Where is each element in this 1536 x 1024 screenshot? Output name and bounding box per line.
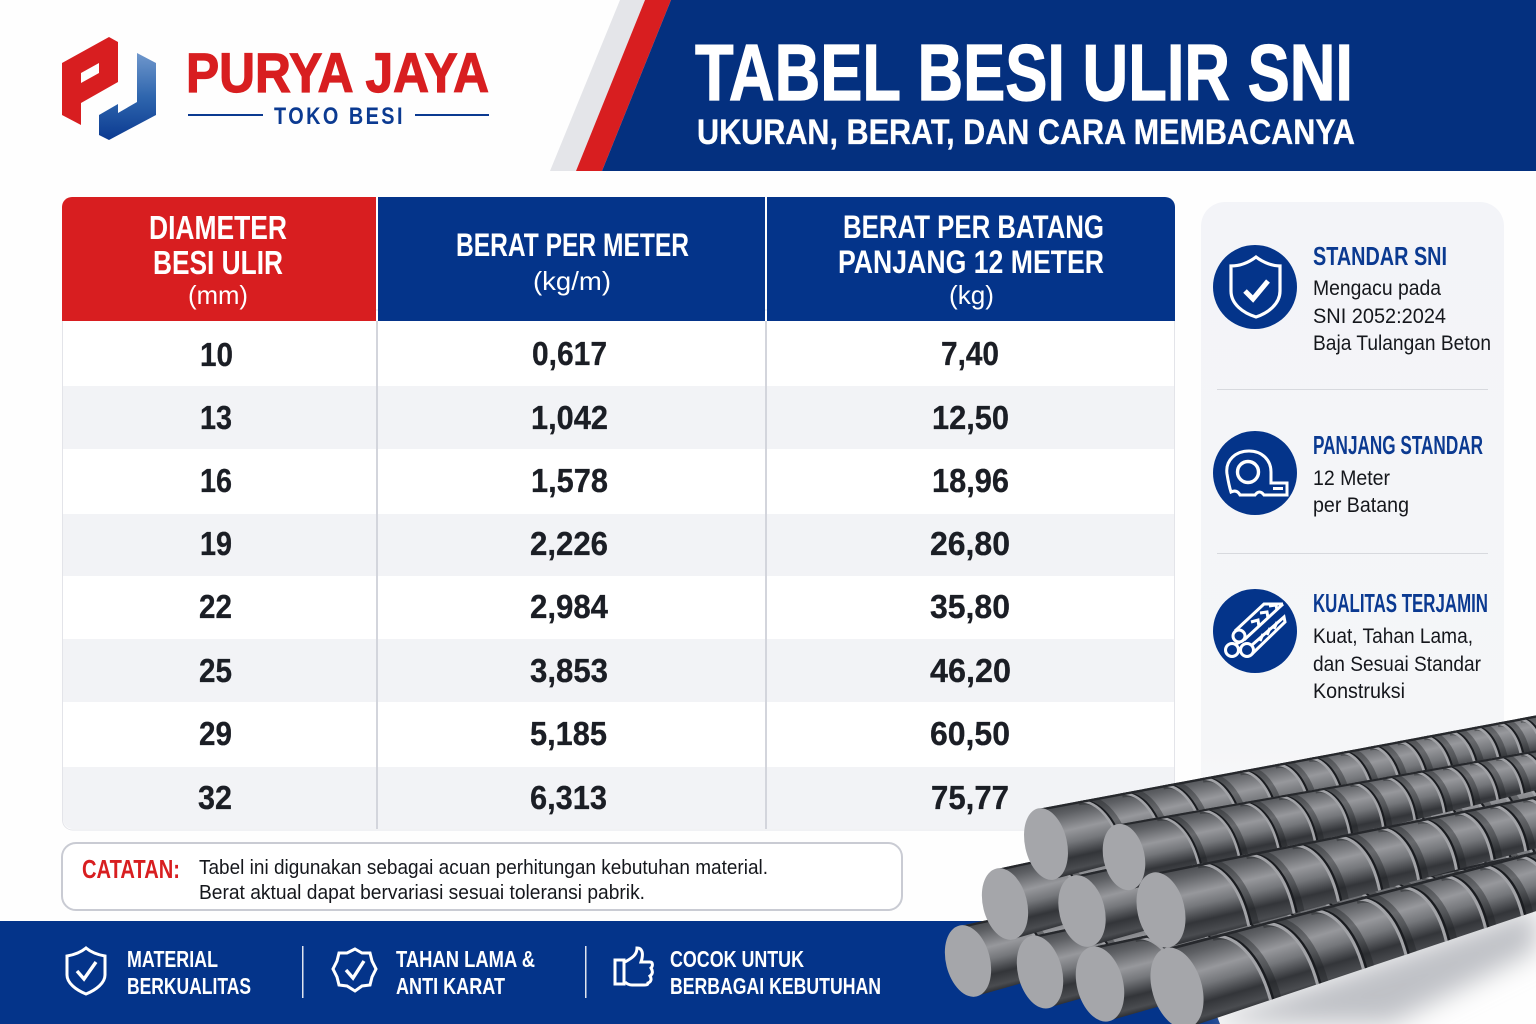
row 16 mm: 18,96 bbox=[932, 462, 1009, 499]
ground shadow under rebar bbox=[1200, 908, 1536, 1024]
row 25 mm bbox=[199, 652, 1011, 689]
row 10 mm: 10 bbox=[200, 336, 233, 373]
footer item: tahan lama: TAHAN LAMA & bbox=[396, 946, 535, 972]
footer item: cocok bbox=[615, 946, 881, 999]
row 13 mm bbox=[200, 399, 1009, 436]
note: catatan: Berat aktual dapat bervariasi sesuai toleransi pabrik. bbox=[199, 882, 645, 904]
panel: info side bbox=[1201, 202, 1504, 842]
icon: thumbs up bbox=[615, 948, 652, 985]
subtitle: UKURAN, BERAT, DAN CARA MEMBACANYA bbox=[697, 113, 1355, 152]
row 22 mm: 22 bbox=[199, 588, 232, 625]
info: standar SNI: SNI 2052:2024 bbox=[1313, 305, 1446, 328]
row 16 mm: 1,578 bbox=[531, 462, 608, 499]
row 32 mm bbox=[198, 779, 1009, 816]
row 10 mm: 7,40 bbox=[941, 335, 999, 372]
row 29 mm: 60,50 bbox=[930, 715, 1010, 752]
icon: shield check bbox=[1213, 245, 1297, 329]
info: panjang standar bbox=[1213, 430, 1483, 517]
row 29 mm bbox=[199, 715, 1010, 752]
table header: berat per meter bbox=[378, 197, 765, 321]
row 25 mm: 25 bbox=[199, 652, 232, 689]
table header: diameter: (mm) bbox=[188, 280, 248, 310]
row 32 mm: 32 bbox=[198, 779, 232, 816]
row 25 mm: 3,853 bbox=[530, 652, 608, 689]
table header: berat per batang: (kg) bbox=[949, 280, 994, 310]
info: standar SNI bbox=[1213, 241, 1491, 355]
info: panjang standar: 12 Meter bbox=[1313, 467, 1390, 490]
footer band bbox=[0, 921, 1220, 1024]
row 16 mm: 16 bbox=[200, 462, 232, 499]
icon: rebar bundle bbox=[1213, 589, 1297, 673]
data table bbox=[62, 197, 1175, 830]
info: standar SNI: STANDAR SNI bbox=[1313, 241, 1447, 271]
row 25 mm: 46,20 bbox=[930, 652, 1011, 689]
logo bbox=[62, 37, 489, 140]
icon: badge check bbox=[333, 949, 376, 991]
table header: berat per batang bbox=[767, 197, 1175, 321]
row 22 mm: 2,984 bbox=[530, 588, 609, 625]
footer item: tahan lama: ANTI KARAT bbox=[396, 973, 505, 999]
logo tagline: TOKO BESI bbox=[274, 103, 405, 130]
table body background bbox=[62, 310, 1174, 830]
note: catatan bbox=[62, 843, 902, 910]
info: kualitas terjamin: Konstruksi bbox=[1313, 680, 1405, 703]
info: standar SNI: Mengacu pada bbox=[1313, 277, 1441, 300]
table header: berat per meter: (kg/m) bbox=[533, 266, 611, 296]
row 19 mm bbox=[200, 525, 1010, 562]
row 29 mm: 29 bbox=[199, 715, 232, 752]
table header: diameter bbox=[62, 197, 376, 321]
title: TABEL BESI ULIR SNI bbox=[695, 28, 1353, 117]
row 10 mm bbox=[200, 335, 999, 373]
logo name: PURYA JAYA bbox=[186, 41, 489, 104]
icon: logo mark bbox=[62, 37, 156, 140]
header banner bbox=[550, 0, 1536, 171]
row 13 mm: 1,042 bbox=[531, 399, 608, 436]
row 32 mm: 6,313 bbox=[530, 779, 607, 816]
row 19 mm: 2,226 bbox=[530, 525, 608, 562]
row 13 mm: 13 bbox=[200, 399, 232, 436]
info: kualitas terjamin: dan Sesuai Standar bbox=[1313, 653, 1481, 676]
table header: berat per batang: BERAT PER BATANG bbox=[843, 209, 1104, 245]
table header: berat per batang: PANJANG 12 METER bbox=[838, 244, 1104, 280]
row 16 mm bbox=[200, 462, 1009, 499]
row 32 mm: 75,77 bbox=[931, 779, 1009, 816]
note: catatan: Tabel ini digunakan sebagai acuan perhitungan kebutuhan material. bbox=[199, 857, 768, 879]
info: kualitas terjamin: Kuat, Tahan Lama, bbox=[1313, 625, 1473, 648]
info: kualitas terjamin bbox=[1213, 588, 1488, 703]
footer item: material berkualitas bbox=[67, 946, 251, 999]
icon: tape measure bbox=[1213, 431, 1297, 515]
footer item: cocok: BERBAGAI KEBUTUHAN bbox=[670, 973, 881, 999]
row 22 mm bbox=[199, 588, 1010, 625]
table header: diameter: BESI ULIR bbox=[153, 244, 283, 281]
icon: shield bbox=[67, 948, 105, 994]
footer item: cocok: COCOK UNTUK bbox=[670, 946, 804, 972]
row 13 mm: 12,50 bbox=[932, 399, 1009, 436]
table header: berat per meter: BERAT PER METER bbox=[456, 227, 689, 263]
row 19 mm: 19 bbox=[200, 525, 232, 562]
footer item: tahan lama bbox=[333, 946, 535, 999]
table header: diameter: DIAMETER bbox=[149, 209, 287, 246]
note: catatan: CATATAN: bbox=[82, 854, 180, 884]
row 10 mm: 0,617 bbox=[532, 335, 607, 372]
row 22 mm: 35,80 bbox=[930, 588, 1010, 625]
info: standar SNI: Baja Tulangan Beton bbox=[1313, 332, 1491, 355]
footer item: material berkualitas: MATERIAL bbox=[127, 946, 218, 972]
footer item: material berkualitas: BERKUALITAS bbox=[127, 973, 251, 999]
rebar bundle bbox=[938, 667, 1536, 1024]
row 29 mm: 5,185 bbox=[530, 715, 607, 752]
row 19 mm: 26,80 bbox=[930, 525, 1010, 562]
info: panjang standar: per Batang bbox=[1313, 494, 1409, 517]
